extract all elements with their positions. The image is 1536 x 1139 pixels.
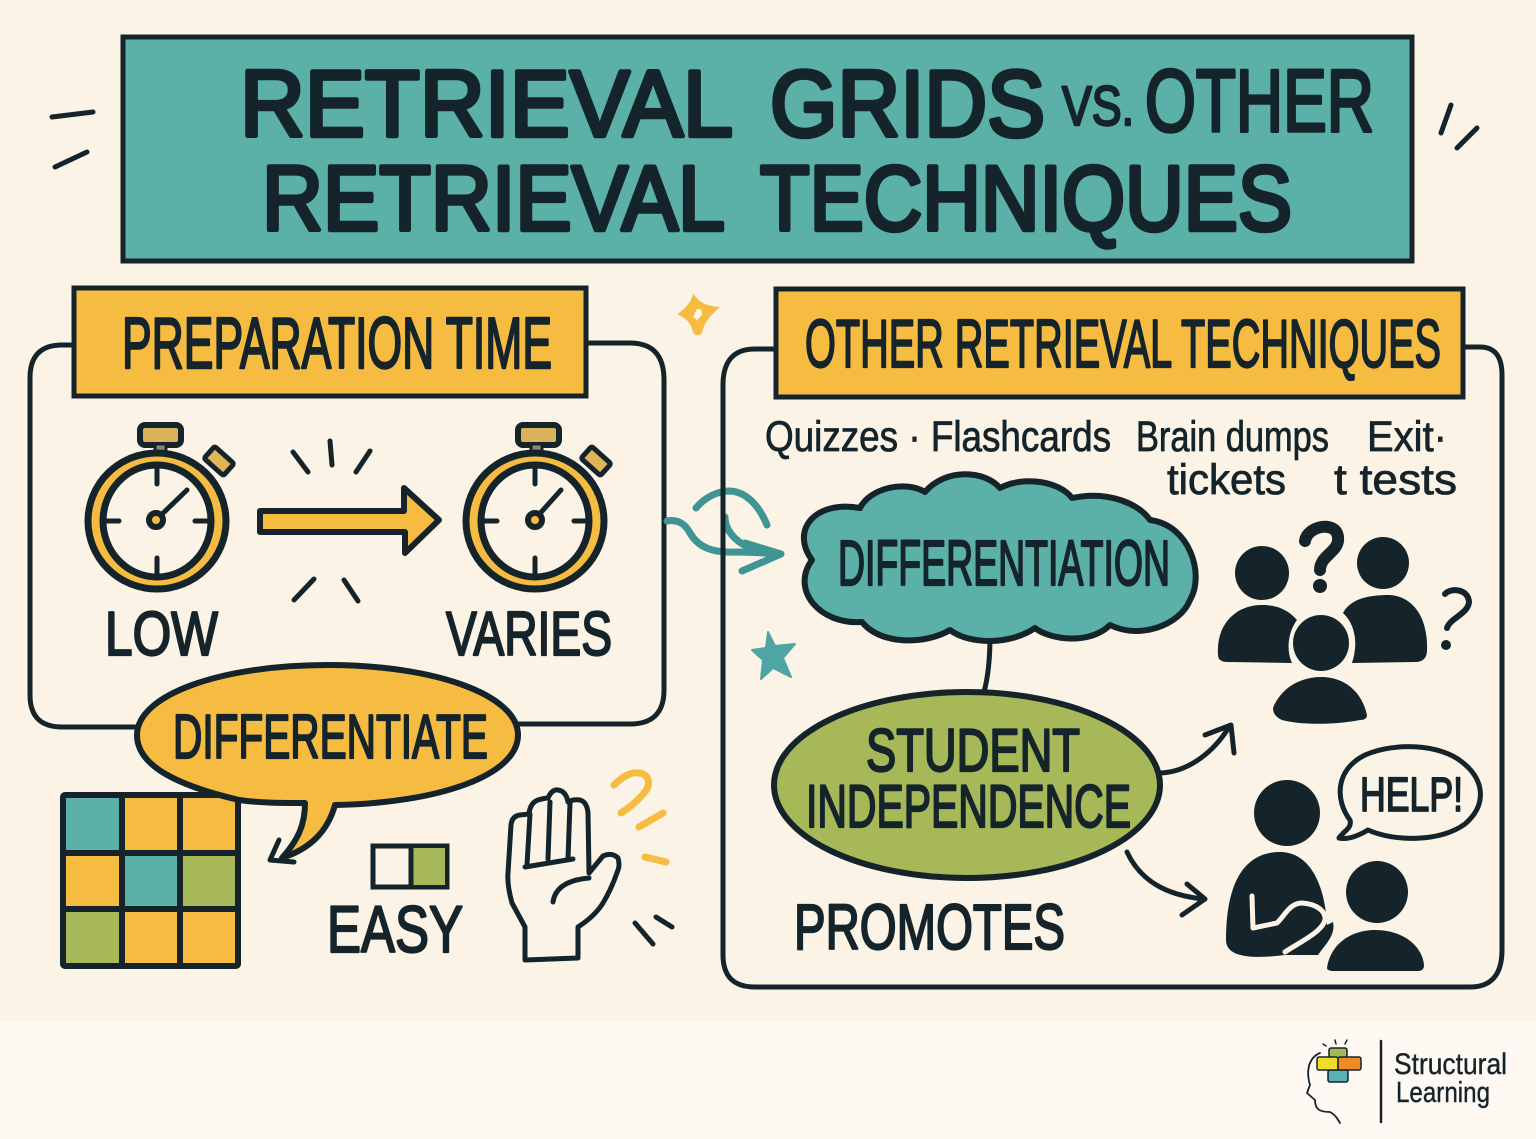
callout: differentiate: DIFFERENTIATE [173, 703, 488, 772]
arrow: teal connector [667, 491, 781, 571]
list of techniques: t tests [1334, 456, 1457, 504]
oval: student independence [774, 692, 1160, 878]
title line one: GRIDS [770, 51, 1045, 156]
oval: student independence: STUDENT [866, 717, 1080, 784]
cloud: differentiation: DIFFERENTIATION [838, 527, 1170, 599]
speech bubble: help: HELP! [1360, 769, 1463, 822]
icon: stopwatch low [88, 425, 234, 589]
logo wordmark: Structural [1394, 1048, 1507, 1081]
arrow: to pair [1127, 852, 1205, 915]
connector line [984, 636, 990, 692]
logo divider [1380, 1041, 1382, 1122]
burst marks [293, 441, 370, 601]
list of techniques: tickets [1167, 456, 1286, 504]
logo wordmark: Learning [1396, 1077, 1490, 1109]
heading: preparation time [74, 288, 586, 396]
heading: other retrieval techniques [776, 289, 1463, 397]
logo wordmark [1394, 1048, 1507, 1109]
icon: yellow star [677, 293, 720, 335]
icon: stopwatch varies [466, 425, 611, 589]
label: promotes: PROMOTES [794, 891, 1065, 963]
icon: help pair [1226, 780, 1424, 971]
panel: preparation time [30, 288, 664, 727]
list of techniques: Quizzes · Flashcards [765, 413, 1111, 461]
title line two: RETRIEVAL [262, 148, 725, 250]
icon: easy toggle [373, 846, 447, 887]
logo: structural learning [1307, 1040, 1507, 1123]
callout: differentiate [137, 665, 518, 862]
accent marks around hand [614, 773, 672, 944]
title banner [123, 37, 1412, 261]
title sparkle marks [52, 105, 1477, 167]
list of techniques: Exit· [1367, 413, 1447, 461]
title line one: RETRIEVAL [240, 51, 733, 156]
heading: preparation time: PREPARATION TIME [122, 304, 552, 384]
title line one [240, 51, 1374, 156]
arrow: low to varies [260, 488, 439, 553]
icon: raised hand [508, 790, 619, 960]
title line two [262, 148, 1292, 250]
title line one: VS. [1062, 74, 1134, 137]
list of techniques: Brain dumps [1136, 413, 1329, 461]
icon: confused group [1218, 527, 1469, 724]
cloud: differentiation [804, 474, 1196, 641]
title line two: TECHNIQUES [760, 148, 1292, 250]
icon: teal star [752, 632, 795, 679]
label: easy: EASY [327, 892, 463, 966]
title line one: OTHER [1145, 51, 1374, 150]
list of techniques [765, 413, 1457, 504]
icon: colour grid [63, 795, 238, 966]
arrow: to group [1160, 725, 1234, 773]
panel: other retrieval techniques [723, 289, 1502, 987]
label: varies: VARIES [446, 600, 612, 669]
oval: student independence: INDEPENDENCE [806, 773, 1131, 840]
speech bubble: help [1339, 747, 1480, 839]
logo mark: head with blocks [1307, 1040, 1361, 1123]
label: low: LOW [105, 600, 218, 669]
